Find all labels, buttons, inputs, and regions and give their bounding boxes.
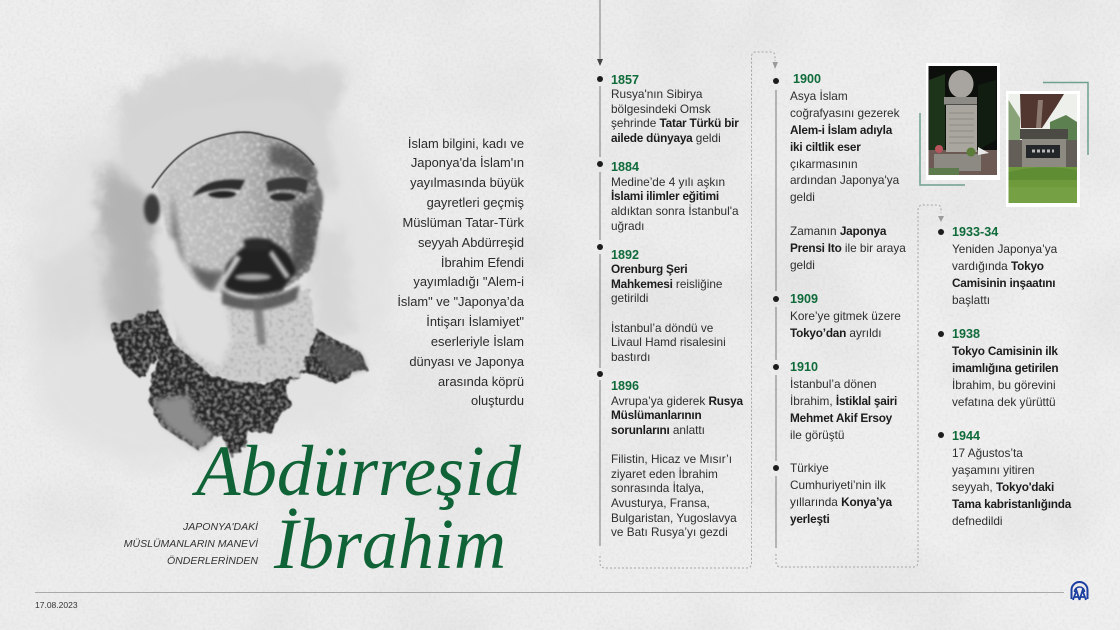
portrait of Abdürreşid İbrahim	[30, 46, 390, 461]
timeline entry 1938	[952, 327, 1058, 409]
timeline entry 1909	[790, 292, 901, 340]
timeline entry 1944: seyyah, Tokyo'daki	[952, 480, 1054, 494]
timeline entry 1892: bastırdı	[611, 350, 650, 364]
title: Abdürreşid İbrahim	[192, 431, 522, 584]
timeline entry 1857: ailede dünyaya geldi	[611, 131, 721, 145]
intro paragraph	[397, 136, 524, 408]
timeline entry 1900: Alem-i İslam adıyla	[790, 123, 892, 137]
timeline entry 1896: ziyaret eden İbrahim	[611, 467, 718, 481]
timeline entry 1884: uğradı	[611, 218, 644, 232]
timeline entry 1857: Rusya'nın Sibirya	[611, 87, 702, 101]
timeline entry 1909: Tokyo’dan ayrıldı	[790, 326, 882, 340]
ears	[144, 187, 323, 224]
coat	[112, 309, 368, 458]
timeline entry 1857: şehrinde Tatar Türkü bir	[611, 116, 739, 130]
intro paragraph: İslam" ve "Japonya’da	[397, 294, 524, 309]
timeline entry 1896: Avusturya, Fransa,	[611, 496, 710, 510]
timeline entry 1944: 17 Ağustos’ta	[952, 446, 1023, 460]
timeline entry 1896: Bulgaristan, Yugoslavya	[611, 511, 737, 525]
title: Abdürreşid İbrahim: İbrahim	[273, 504, 506, 584]
photo: cemetery entrance	[1006, 91, 1080, 207]
footer divider	[35, 592, 1064, 593]
timeline entry 1857: bölgesindeki Omsk	[611, 102, 711, 116]
timeline entry 1910: Cumhuriyeti’nin ilk	[790, 478, 886, 492]
intro paragraph: yayımladığı "Alem-i	[413, 274, 524, 289]
intro paragraph: oluşturdu	[471, 393, 524, 408]
timeline entry 1933-34: Yeniden Japonya’ya	[952, 242, 1057, 256]
subtitle	[124, 521, 258, 567]
timeline entry 1944: yaşamını yitiren	[952, 463, 1035, 477]
timeline entry 1910: 1910	[790, 360, 818, 374]
timeline entry 1884: 1884	[611, 160, 639, 174]
turban edge	[152, 132, 314, 188]
timeline entry 1910: Mehmet Akif Ersoy	[790, 411, 892, 425]
beard	[175, 285, 318, 384]
timeline entry 1910: yerleşti	[790, 512, 830, 526]
timeline entry 1884	[611, 160, 739, 232]
photo: tombstone	[926, 63, 1000, 180]
timeline entry 1910: Türkiye	[790, 461, 829, 475]
intro paragraph: dünyası ve Japonya	[409, 354, 524, 369]
eyes and brows	[192, 177, 308, 201]
timeline entry 1938: Tokyo Camisinin ilk	[952, 344, 1058, 358]
timeline entry 1938: imamlığına getirilen	[952, 361, 1058, 375]
timeline entry 1884: İslami ilimler eğitimi	[611, 189, 719, 203]
timeline entry 1900: ardından Japonya'ya	[790, 173, 899, 187]
timeline entry 1892: İstanbul’a döndü ve	[611, 321, 713, 335]
timeline entry 1944: Tama kabristanlığında	[952, 497, 1071, 511]
intro paragraph: Japonya'da İslam'ın	[411, 155, 524, 170]
timeline entry 1910: İstanbul’a dönen	[790, 377, 877, 391]
timeline entry 1900: geldi	[790, 190, 815, 204]
timeline entry 1933-34: başlattı	[952, 293, 990, 307]
timeline entry 1900: Asya İslam	[790, 89, 848, 103]
photo frames accent	[919, 82, 1089, 186]
timeline entry 1900	[790, 72, 906, 272]
intro paragraph: yayılmasında büyük	[410, 175, 524, 190]
date: 17.08.2023	[35, 600, 78, 610]
intro paragraph: İbrahim Efendi	[441, 255, 524, 270]
timeline entry 1892: Mahkemesi reisliğine	[611, 277, 722, 291]
icon: AA logo	[1070, 581, 1088, 600]
intro paragraph: gayretleri geçmiş	[427, 195, 524, 210]
title: Abdürreşid İbrahim: Abdürreşid	[192, 431, 522, 511]
timeline entry 1933-34: Camisinin inşaatını	[952, 276, 1055, 290]
timeline entry 1938: İbrahim, bu görevini	[952, 378, 1056, 392]
timeline entry 1896: Avrupa’ya giderek Rusya	[611, 394, 743, 408]
timeline entry 1909: 1909	[790, 292, 818, 306]
timeline entry 1900: Prensi Ito ile bir araya	[790, 241, 906, 255]
intro paragraph: arasında köprü	[438, 374, 524, 389]
timeline entry 1896: 1896	[611, 379, 639, 393]
timeline entry 1900: Zamanın Japonya	[790, 224, 886, 238]
timeline entry 1900: iki ciltlik eser	[790, 140, 861, 154]
subtitle: JAPONYA'DAKİ	[183, 521, 258, 533]
timeline entry 1896: sonrasında İtalya,	[611, 481, 704, 495]
timeline entry 1910: yıllarında Konya’ya	[790, 495, 892, 509]
timeline entry 1896: sorunlarını anlattı	[611, 423, 705, 437]
timeline entry 1900: çıkarmasının	[790, 157, 858, 171]
intro paragraph: seyyah Abdürreşid	[418, 235, 524, 250]
timeline entry 1896: Müslümanlarının	[611, 408, 701, 422]
watercolor wash	[28, 35, 400, 470]
timeline entry 1910: İbrahim, İstiklal şairi	[790, 394, 897, 408]
timeline entry 1910	[790, 360, 897, 526]
timeline entry 1944: 1944	[952, 429, 980, 443]
timeline entry 1900: geldi	[790, 258, 815, 272]
timeline entry 1896: ve Batı Rusya’yı gezdi	[611, 525, 728, 539]
timeline entry 1938: vefatına dek yürüttü	[952, 395, 1056, 409]
timeline entry 1892: 1892	[611, 248, 639, 262]
timeline entry 1884: Medine’de 4 yılı aşkın	[611, 175, 725, 189]
timeline entry 1900: 1900	[793, 72, 821, 86]
timeline entry 1933-34: vardığında Tokyo	[952, 259, 1044, 273]
timeline entry 1884: aldıktan sonra İstanbul'a	[611, 204, 739, 218]
timeline entry 1910: ile görüştü	[790, 428, 844, 442]
timeline entry 1857: 1857	[611, 72, 639, 86]
timeline entry 1944	[952, 429, 1072, 528]
timeline entry 1896: Filistin, Hicaz ve Mısır’ı	[611, 452, 732, 466]
timeline entry 1900: coğrafyasını gezerek	[790, 106, 900, 120]
face	[157, 131, 322, 300]
timeline entry 1892	[611, 248, 726, 364]
timeline entry 1909: Kore’ye gitmek üzere	[790, 309, 901, 323]
turban	[122, 99, 328, 195]
timeline entry 1892: Orenburg Şeri	[611, 262, 687, 276]
coat wash	[152, 395, 215, 450]
timeline entry 1892: Livaul Hamd risalesini	[611, 335, 726, 349]
face shading	[172, 145, 318, 292]
timeline entry 1933-34	[952, 225, 1058, 307]
intro paragraph: İntişarı İslamiyet"	[426, 314, 524, 329]
timeline entry 1896	[611, 379, 744, 539]
intro paragraph: İslam bilgini, kadı ve	[408, 136, 524, 150]
mustache and mouth	[215, 238, 300, 345]
timeline entry 1938: 1938	[952, 327, 980, 341]
intro paragraph: eserleriyle İslam	[431, 334, 524, 349]
subtitle: ÖNDERLERİNDEN	[167, 555, 258, 567]
timeline entry 1944: defnedildi	[952, 514, 1003, 528]
timeline entry 1892: getirildi	[611, 291, 648, 305]
timeline entry 1857	[611, 72, 739, 145]
subtitle: MÜSLÜMANLARIN MANEVİ	[124, 538, 258, 550]
timeline entry 1933-34: 1933-34	[952, 225, 998, 239]
intro paragraph: Müslüman Tatar-Türk	[402, 215, 524, 230]
